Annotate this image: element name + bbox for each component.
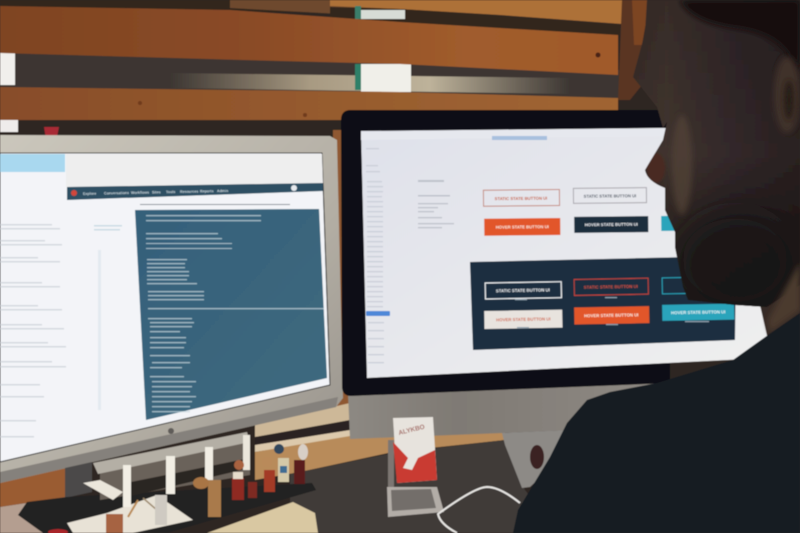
lego scene — [18, 432, 318, 533]
black base — [18, 483, 316, 533]
neck highlight — [768, 262, 800, 332]
right monitor — [341, 110, 768, 488]
minifigures — [106, 444, 308, 533]
window light left — [0, 53, 15, 85]
dark building block — [65, 462, 92, 498]
code panel — [135, 209, 327, 420]
business card — [393, 417, 437, 483]
left monitor: Conversations — [104, 191, 129, 195]
browser sidebar header — [0, 154, 65, 172]
head — [633, 0, 800, 307]
white cable — [438, 487, 520, 533]
button rows on light area: HOVER STATE BUTTON UI — [585, 222, 638, 227]
shelf dark — [255, 420, 350, 445]
knots — [596, 52, 600, 58]
left monitor: Explore — [83, 192, 96, 196]
monitor stand — [502, 430, 570, 488]
dark strip under top plank — [330, 7, 620, 35]
white columns — [123, 465, 131, 507]
wood plank middle — [0, 87, 618, 120]
top edge shadow — [0, 0, 660, 12]
red round piece — [48, 529, 68, 533]
screen — [0, 153, 330, 462]
hair — [680, 0, 800, 70]
right monitor: STATIC STATE BUTTON UI — [496, 287, 550, 293]
shelf white strip — [255, 430, 350, 452]
black bezel — [341, 110, 670, 396]
building windows — [100, 436, 250, 500]
white floor — [67, 495, 193, 533]
sidebar text lines — [0, 224, 66, 438]
wood slat behind left monitor — [333, 130, 353, 420]
line-number column — [94, 225, 122, 410]
white deck — [83, 480, 123, 500]
gap under first plank — [0, 50, 620, 100]
right monitor: STATIC STATE BUTTON UI — [584, 284, 638, 290]
shoulder — [513, 313, 800, 533]
card holder — [387, 417, 444, 517]
dark button panel — [470, 256, 736, 350]
button rows on light area: STATIC STATE BUTTON UI — [495, 196, 547, 201]
button rows on light area: HOVER STATE BUTTON UI — [496, 224, 549, 230]
button rows on light area — [483, 187, 675, 236]
right monitor: HOVER STATE BUTTON UI — [584, 312, 639, 318]
top plank segment — [230, 0, 400, 18]
red pin — [44, 127, 59, 152]
selected layer — [366, 311, 390, 316]
apple logo — [168, 428, 174, 434]
cheek highlight — [672, 115, 692, 215]
tan desk back — [255, 432, 505, 480]
top right plank — [330, 0, 625, 24]
left monitor: Sites — [152, 190, 161, 194]
wood left desk edge — [0, 464, 66, 507]
window light top centre — [360, 10, 405, 19]
shelf cream — [255, 403, 350, 437]
left monitor — [0, 135, 343, 483]
head shading and features — [646, 0, 800, 307]
ear — [774, 57, 800, 133]
cream box — [207, 502, 318, 533]
card holder: ALYKBO — [398, 424, 426, 437]
acrylic back — [388, 440, 394, 487]
pale light band in gap — [170, 73, 570, 94]
desk — [290, 440, 560, 533]
browser toolbar — [66, 154, 323, 187]
roof plate — [93, 432, 250, 474]
button rows on light area: STATIC STATE BUTTON UI — [584, 193, 636, 199]
neck — [680, 230, 800, 340]
layers sidebar — [366, 148, 384, 363]
left monitor: Resources — [180, 190, 198, 194]
person — [513, 0, 800, 533]
code lines — [146, 215, 324, 412]
post right of planks — [618, 0, 650, 100]
left monitor: Admin — [217, 189, 228, 193]
right monitor: HOVER STATE BUTTON UI — [671, 309, 725, 315]
navigation bar — [67, 183, 323, 200]
window light centre — [361, 64, 411, 92]
left monitor: Tools — [166, 190, 175, 194]
notes column — [418, 180, 454, 228]
left monitor: Reports — [200, 189, 214, 193]
screen — [361, 128, 768, 378]
window light lower left — [0, 118, 18, 132]
acrylic base — [387, 487, 444, 517]
small captions on dark panel — [515, 297, 709, 328]
right monitor: HOVER STATE BUTTON UI — [496, 316, 551, 322]
aluminium chin — [348, 380, 660, 439]
monitor bezel — [0, 135, 343, 483]
left monitor: Workflows — [131, 191, 149, 195]
nose tip — [647, 153, 665, 183]
wood plank top — [0, 6, 618, 75]
jaw shade — [678, 214, 756, 306]
